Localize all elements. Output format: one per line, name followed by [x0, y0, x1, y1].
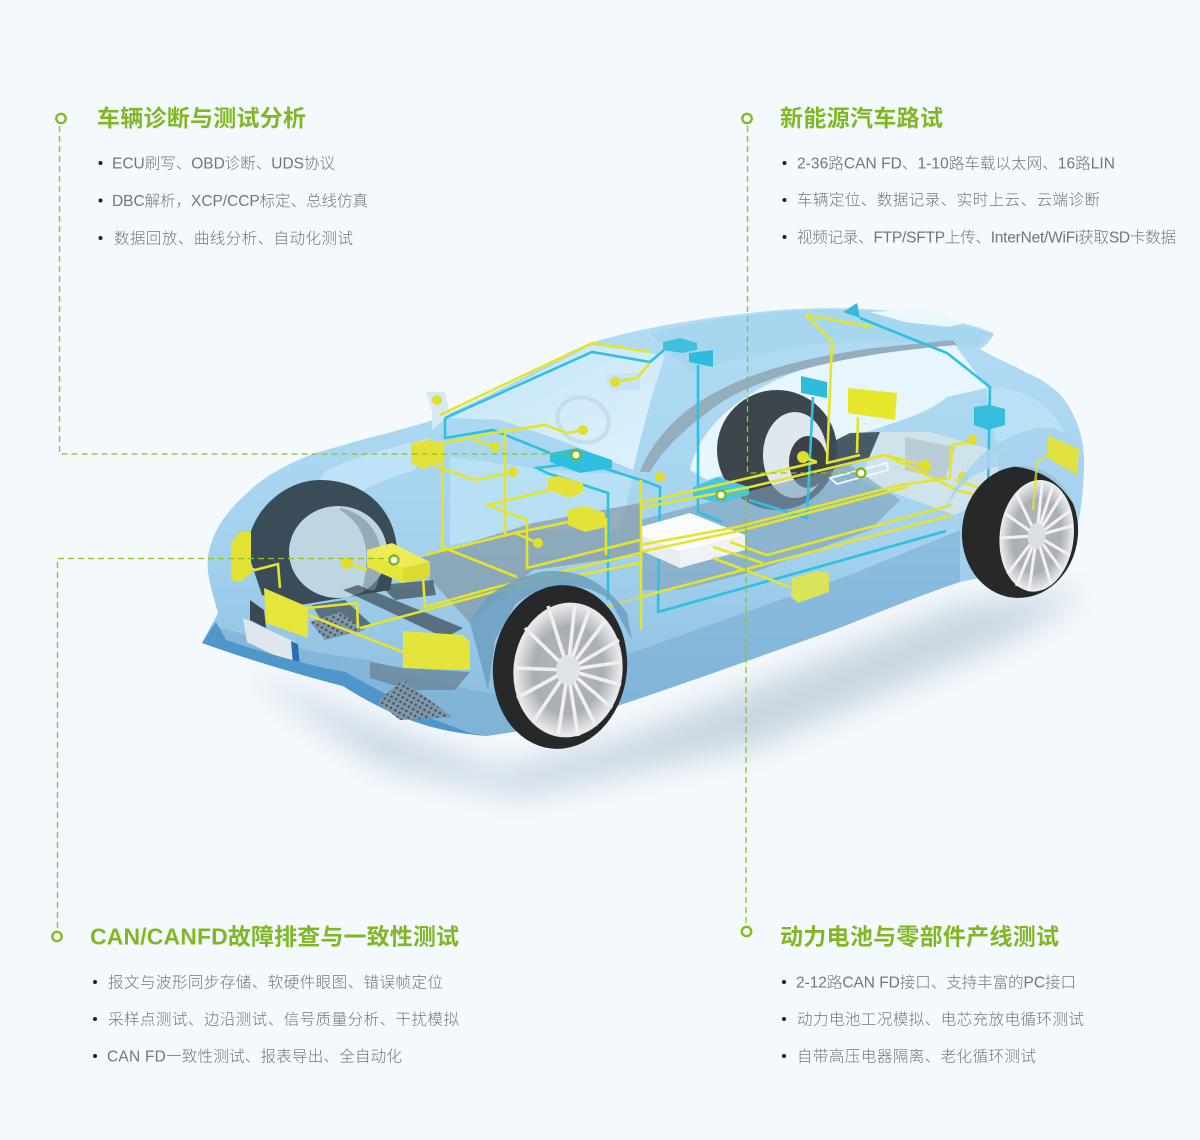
icon: bullet ring [742, 927, 751, 936]
car illustration [58, 126, 1090, 928]
rear yellow sensor box [1048, 436, 1079, 475]
bullet list: 视频记录、FTP/SFTP上传、InterNet/WiFi获取SD卡数据 [797, 228, 1176, 246]
icon: bullet ring [742, 114, 752, 123]
bullet list [782, 154, 1176, 246]
bullet list: CAN FD一致性测试、报表导出、全自动化 [107, 1048, 402, 1066]
lower air intake [377, 680, 452, 720]
bullet list: 采样点测试、边沿测试、信号质量分析、干扰模拟 [108, 1010, 459, 1028]
icon: bullet ring [56, 114, 66, 123]
far side front wheel [247, 480, 397, 605]
rear quarter glow [985, 388, 1070, 470]
bumper mesh [310, 612, 365, 640]
cyan wiring [445, 318, 990, 612]
interior floor front [413, 503, 640, 623]
panel: CAN troubleshooting bottom left [52, 924, 459, 1066]
bullet list: 报文与波形同步存储、软硬件眼图、错误帧定位 [108, 974, 443, 992]
bullet list [98, 154, 368, 248]
side window [690, 345, 987, 480]
side mirror [426, 392, 450, 430]
heading: 动力电池与零部件产线测试 [780, 924, 1059, 950]
bumper dark [250, 600, 266, 628]
front wheel arch fender [470, 571, 632, 690]
ground shadow [240, 590, 1090, 795]
bullet list: DBC解析，XCP/CCP标定、总线仿真 [112, 192, 368, 210]
rear wheel [955, 460, 1085, 604]
bullet list: ECU刷写、OBD诊断、UDS协议 [112, 154, 335, 172]
bullet list: 数据回放、曲线分析、自动化测试 [114, 230, 353, 248]
yellow sensor knobs [341, 377, 977, 569]
callout dashed leader lines [58, 126, 861, 928]
icon: bullet ring [52, 932, 62, 941]
panel: new energy road test top right [742, 105, 1176, 246]
panel: diagnostics top left [56, 105, 368, 248]
heading: 新能源汽车路试 [780, 105, 943, 131]
yellow control units [231, 388, 897, 670]
windshield [450, 345, 665, 470]
white central controller [640, 513, 745, 568]
rear wire over fender [1033, 453, 1050, 510]
heading: CAN/CANFD故障排查与一致性测试 [90, 924, 459, 950]
rear fender over tyre [945, 427, 1084, 510]
bullet list [93, 974, 459, 1066]
front chassis bars [312, 580, 463, 638]
bullet list [782, 974, 1084, 1066]
lower body shade [202, 530, 960, 736]
hood highlight panels [300, 438, 633, 545]
far side rear wheel [717, 390, 837, 510]
steering wheel [551, 390, 615, 450]
bullet list: 动力电池工况模拟、电芯充放电循环测试 [797, 1010, 1084, 1028]
rear mirror [605, 372, 640, 390]
bullet list: 车辆定位、数据记录、实时上云、云端诊断 [797, 191, 1100, 209]
bullet list: 自带高压电器隔离、老化循环测试 [797, 1048, 1036, 1066]
front lower block [370, 662, 470, 690]
front wheel [485, 578, 635, 756]
cyan control units [550, 303, 1005, 503]
roof and spoiler highlights [640, 309, 993, 472]
heading: 车辆诊断与测试分析 [97, 105, 306, 131]
yellow wiring [247, 315, 1033, 652]
callout target dots on car [390, 450, 866, 564]
panel: battery and parts production bottom right [742, 924, 1084, 1066]
white outline module [830, 463, 888, 484]
car body shell [202, 308, 1084, 736]
bullet list: 2-36路CAN FD、1-10路车载以太网、16路LIN [797, 154, 1115, 172]
rear drivetrain [826, 432, 1000, 515]
licence plate [243, 618, 300, 668]
front splitter lip [202, 622, 487, 736]
interior floor rear [640, 465, 900, 590]
bullet list: 2-12路CAN FD接口、支持丰富的PC接口 [796, 974, 1076, 992]
